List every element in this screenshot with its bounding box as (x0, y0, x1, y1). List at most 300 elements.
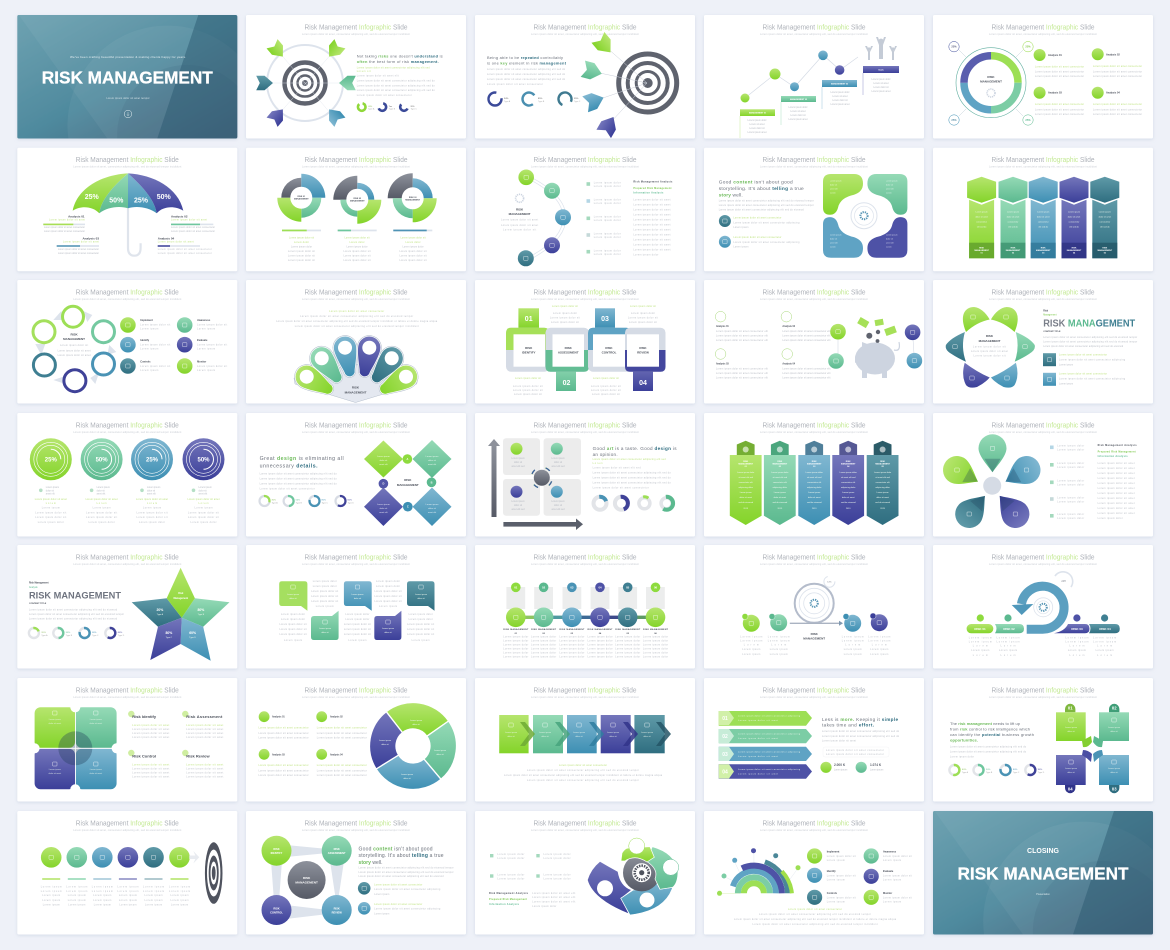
step captions: Lorem ipsum dolor (588, 640, 613, 643)
analysis 04: Lorem ipsum dolor sit amet consectetur (158, 252, 212, 255)
closing label: CLOSING (1027, 848, 1060, 855)
caption blocks: Lorem ipsum dolor sit (280, 628, 307, 631)
list items: Lorem ipsum dolor (1057, 462, 1084, 465)
donut stats: 80% (322, 500, 326, 502)
captions: Lorem ipsum (770, 653, 788, 656)
captions: Lorem ipsum dolor (139, 521, 165, 524)
title: Lorem ipsum dolor sit amet, consectetur adipiscing elit, sed do eiusmod tempor incididunt (302, 166, 410, 169)
hub diagram: REVIEW (332, 910, 342, 914)
star chart: Type B (198, 614, 205, 616)
hub diagram: RISK (273, 847, 280, 851)
banner 01: Lorem ipsum dolor (737, 471, 755, 474)
step captions: Lorem ipsum dolor (643, 640, 668, 643)
text block: Lorem ipsum dolor sit amet consectetur adipiscing elit sed do (593, 476, 671, 480)
captions: Lorem ipsum (144, 899, 163, 902)
captions: Lorem ipsum (996, 640, 1020, 644)
six item list: Controls (827, 892, 838, 895)
donut stats (29, 628, 125, 638)
analysis 02 (171, 214, 215, 233)
step 2: Lorem ipsum amet (788, 118, 808, 121)
analysis column: Lorem ipsum dolor sit amet (1098, 477, 1135, 480)
caption blocks: Lorem ipsum dolor sit (407, 623, 434, 626)
banner 01: MANAGEMENT (738, 463, 754, 466)
flower diagram: MANAGEMENT (979, 339, 1001, 343)
text block (593, 446, 677, 490)
analysis text: Lorem ipsum dolor (532, 905, 557, 908)
caption blocks: Lorem ipsum (316, 605, 334, 608)
step captions: Lorem ipsum dolor (531, 652, 556, 655)
bottom text: Lorem ipsum dolor sit amet consectetur adipiscing elit sed do eiusmod tempor (527, 769, 639, 772)
banner 01: consectetur elit (739, 481, 753, 484)
title: Risk Management Infographic Slide (304, 24, 408, 32)
banner 03 (798, 441, 830, 525)
text block: Less is more. Keeping it simple (822, 717, 898, 722)
piggy bank with money (828, 317, 922, 378)
risk assessment text: Risk Assessment (186, 714, 223, 719)
six item list: Lorem ipsum (827, 900, 845, 904)
captions: Lorem ipsum (870, 653, 888, 656)
feature items: Lorem ipsum dolor sit amet consectetur adipiscing (1059, 358, 1126, 362)
center target (790, 576, 843, 640)
analysis items: Lorem ipsum dolor sit amet consectetur (1035, 103, 1084, 106)
title: Risk Management Infographic Slide (76, 820, 179, 828)
heading block: Lorem ipsum dolor sit amet consectetur adipiscing elit sed do eiusmod tempor (29, 613, 124, 616)
arrow bar 02 (719, 729, 812, 743)
step captions: Lorem ipsum dolor (588, 644, 613, 647)
title: Lorem ipsum dolor sit amet, consectetur adipiscing elit, sed do eiusmod tempor incididunt (760, 431, 868, 434)
captions: Lorem ipsum (143, 886, 164, 888)
arrow bar 02: 02 (722, 734, 728, 740)
analysis blocks: Lorem ipsum dolor sit amet consectetur elit (716, 368, 768, 370)
analysis items: Lorem ipsum dolor sit amet consectetur (1093, 70, 1142, 74)
text block: Lorem ipsum dolor sit amet elit (357, 74, 399, 78)
timeline: 04 (598, 585, 602, 589)
arrow and target (189, 842, 222, 904)
step 3: Lorem ipsum dolor (830, 91, 850, 94)
captions: Lorem ipsum (169, 890, 190, 893)
chevron process: Lorem ipsum (539, 731, 551, 734)
caption blocks: Lorem ipsum dolor sit (311, 595, 339, 598)
slide: four percent circles (17, 413, 237, 536)
title: Lorem ipsum dolor sit amet, consectetur adipiscing elit, sed do eiusmod tempor incididunt (989, 33, 1097, 36)
analysis 01 (43, 214, 85, 233)
slide: target with six arrows (246, 15, 466, 138)
banner 05: RISK (880, 461, 886, 463)
title: Risk Management Infographic Slide (534, 688, 637, 694)
text block: Lorem ipsum dolor sit amet consectetur adipiscing elit sed (593, 458, 666, 461)
stats: 1.074 K (870, 763, 882, 767)
diamond diagram: B (431, 480, 433, 484)
banner 04: MANAGEMENT (841, 463, 856, 466)
six item list: Lorem ipsum dolor sit (827, 874, 856, 878)
title (531, 24, 639, 36)
heading block: Lorem ipsum dolor sit amet consectetur adipiscing elit sed do eiusmod tempor (1043, 340, 1137, 344)
title (531, 290, 639, 301)
step captions: Lorem ipsum dolor (531, 656, 556, 659)
banner 03: Lorem ipsum dolor (806, 471, 823, 474)
bubble row: dolor sit (417, 597, 425, 600)
title: Risk Management Infographic Slide (76, 422, 179, 430)
captions: Lorem ipsum dolor (89, 521, 115, 524)
list items: Lorem ipsum dolor (594, 185, 621, 188)
captions: Lorem ipsum (742, 653, 760, 656)
puzzle diagram: Lorem ipsum (1108, 726, 1120, 729)
step captions: 06 (654, 633, 657, 635)
six item list: Monitor (883, 892, 892, 895)
analysis list: Lorem ipsum dolor sit amet consectetur (317, 726, 367, 730)
column 02: MANAGEMENT (1006, 249, 1021, 252)
matrix quadrants: amet elit sed (551, 465, 565, 468)
analysis items: Analysis 01 (1048, 54, 1062, 57)
slide: chevron squares (475, 678, 695, 802)
captions: Lorem ipsum dolor sit (400, 255, 427, 258)
risk review text: Risk Review (186, 754, 211, 758)
title: Risk Management Infographic Slide (762, 422, 866, 430)
title: Risk Management Infographic Slide (762, 554, 866, 562)
risk identify text: Lorem ipsum dolor sit amet (132, 724, 170, 727)
puzzle diagram: dolor sit (1110, 771, 1118, 774)
step 4 (863, 66, 899, 95)
captions: Lorem (46, 502, 56, 505)
analysis 02: Lorem ipsum dolor sit amet consectetur (171, 226, 215, 229)
flower diagram: RISK (986, 334, 994, 338)
diamond diagram: MANAGEMENT (397, 483, 419, 487)
slide: target with four nodes (704, 545, 924, 668)
slide: cover risk management (17, 15, 237, 138)
frame 03 risk control: RISK (605, 346, 613, 350)
donut stats: 35% (574, 98, 578, 100)
captions: Lorem ipsum dolor sit (136, 511, 168, 514)
donut stats: Type B (389, 108, 396, 110)
title (302, 290, 410, 301)
column 05: 05 (1104, 253, 1107, 255)
percent callouts: 25% (1025, 45, 1031, 49)
frame 04 risk review: RISK (639, 346, 647, 350)
analysis 04: Lorem ipsum dolor sit amet consectetur (158, 248, 212, 251)
bottom text: Lorem ipsum dolor sit amet consectetur (788, 908, 842, 911)
captions: Lorem ipsum (117, 886, 138, 888)
column 03: dolor sit amet (1037, 216, 1050, 219)
analysis list: Lorem ipsum dolor sit amet consectetur (317, 770, 367, 772)
feature items (719, 215, 800, 249)
risk assessment text: Lorem ipsum dolor sit amet (186, 732, 224, 735)
title: Risk Management Infographic Slide (534, 24, 637, 32)
caption blocks: Lorem ipsum dolor sit (344, 633, 371, 636)
analysis blocks: Lorem ipsum dolor sit amet consectetur elit (782, 368, 831, 370)
diamond diagram: dolor sit (428, 459, 436, 462)
blob diagram: dolor sit (830, 238, 837, 241)
feature items (1043, 353, 1126, 386)
donut stats: Type C (322, 502, 328, 504)
captions: Lorem ipsum (844, 648, 862, 651)
blob diagram: amet elit (886, 188, 894, 191)
column 02: dolor sit amet (1007, 216, 1020, 219)
captions: Lorem ipsum (1068, 649, 1086, 652)
captions: Lorem ipsum (969, 640, 992, 644)
captions: Lorem ipsum (119, 899, 137, 902)
puzzle diagram (1056, 704, 1129, 793)
step 4: Lorem ipsum amet (871, 90, 891, 93)
title: Risk Management Infographic Slide (304, 554, 408, 562)
analysis text: Lorem ipsum dolor sit amet elit (532, 892, 576, 895)
step 1: Lorem sit amet (749, 123, 765, 126)
list items: Lorem ipsum dolor (1057, 513, 1084, 516)
captions: Lorem ipsum (770, 648, 788, 651)
analysis list: Lorem ipsum dolor sit amet consectetur (258, 764, 309, 767)
analysis items: Lorem ipsum dolor sit amet consectetur (1093, 75, 1142, 78)
banner 03: sed do eiusmod (807, 502, 822, 504)
title: Risk Management Infographic Slide (992, 422, 1095, 430)
step captions: Lorem ipsum dolor (559, 636, 585, 639)
banner 03: Lorem ipsum (808, 491, 820, 494)
frame 01 risk identify: RISK (525, 346, 533, 350)
title: Risk Management Infographic Slide (76, 554, 179, 562)
slide: three quadrant donuts (246, 148, 466, 271)
line chart nodes (740, 50, 858, 102)
step captions: Lorem ipsum dolor (503, 652, 529, 655)
step 2 (781, 96, 816, 125)
captions: Lorem ipsum dolor sit (289, 237, 314, 240)
title: Risk Management Infographic Slide (992, 688, 1095, 694)
captions: Lorem ipsum (143, 890, 164, 893)
quadrant diagram: dolor sit amet (90, 772, 102, 775)
donut stats: 40% (368, 106, 372, 108)
analysis column: Lorem ipsum dolor sit amet (633, 249, 671, 252)
circle 25 percent (30, 438, 72, 480)
text block: Lorem ipsum dolor sit amet consectetur adipiscing elit sed do (487, 73, 566, 76)
captions: Lorem ipsum dolor (291, 246, 312, 249)
text block: Good art is a taste. Good design is (593, 446, 677, 451)
analysis column: Prepared Risk Management (1098, 450, 1136, 454)
captions: amet elit (198, 493, 208, 496)
donut stats: Type A (272, 502, 278, 504)
step captions: Lorem ipsum dolor (559, 648, 585, 651)
banner 02 (764, 441, 796, 525)
analysis items (1034, 48, 1142, 116)
donut stats: Type B (538, 101, 545, 103)
ring cycle: Lorem ipsum dolor sit amet (58, 349, 91, 352)
percent callouts: 25% (951, 118, 957, 122)
flower diagram: Lorem ipsum dolor sit amet (971, 350, 1008, 353)
text block (357, 54, 443, 97)
risk assessment text (182, 711, 224, 739)
donut stats: Type A (368, 108, 375, 110)
title: Lorem ipsum dolor sit amet, consectetur adipiscing elit, sed do eiusmod tempor incididunt (531, 166, 639, 169)
captions: Lorem ipsum dolor sit (188, 516, 219, 519)
heading block: RISK MANAGEMENT (29, 590, 121, 601)
ring cycle: Lorem ipsum dolor sit (60, 344, 88, 347)
captions: Lorem (1069, 644, 1084, 648)
analysis column: Lorem ipsum dolor sit amet (633, 204, 671, 207)
step captions: Lorem ipsum dolor (643, 652, 668, 655)
text block: Lorem ipsum dolor sit amet consectetur adipiscing elit sed do (487, 68, 566, 71)
arrow bar 01: Lorem ipsum dolor sit amet consectetur adipiscing (738, 714, 801, 718)
banner 01: Lorem ipsum (740, 491, 752, 494)
frame 04 risk review (625, 328, 666, 391)
arrow bar 03: 03 (722, 752, 728, 758)
star chart: Type C (166, 637, 173, 639)
title: Lorem ipsum dolor sit amet, consectetur adipiscing elit, sed do eiusmod tempor incididunt (302, 431, 410, 434)
title (531, 554, 639, 566)
analysis 04 (158, 237, 212, 255)
analysis column: Lorem ipsum dolor sit amet (1098, 492, 1135, 495)
step captions: Lorem ipsum dolor (559, 640, 585, 643)
frame 02 risk assessment: ASSESSMENT (558, 350, 579, 354)
analysis blocks: Lorem ipsum dolor sit amet consectetur elit (782, 376, 831, 379)
title: Lorem ipsum dolor sit amet, consectetur adipiscing elit, sed do eiusmod tempor incididunt (531, 33, 639, 36)
list items (490, 853, 571, 880)
donut stats (488, 90, 581, 108)
caption blocks: Lorem ipsum dolor sit (374, 600, 402, 603)
step 4: Lorem sit amet (873, 82, 889, 85)
analysis list: Lorem ipsum dolor sit amet consectetur (258, 736, 309, 740)
step captions: Lorem ipsum dolor (615, 648, 640, 651)
arrow bar 02: Lorem ipsum dolor sit amet consectetur adipiscing (738, 732, 801, 736)
diamond diagram: Lorem ipsum (426, 455, 438, 458)
analysis items: Lorem ipsum dolor sit amet consectetur (1035, 108, 1084, 112)
diamond diagram: C (407, 505, 409, 509)
timeline: 02 (542, 585, 546, 589)
slide: swirl pie (475, 811, 695, 934)
title (760, 290, 868, 301)
caption blocks: Lorem ipsum dolor sit (592, 393, 620, 396)
timeline: 01 (514, 585, 518, 589)
step captions: Lorem ipsum dolor (559, 656, 585, 659)
column 04: consectetur (1069, 221, 1080, 224)
six item list: Lorem ipsum (140, 328, 158, 330)
captions: Lorem ipsum (999, 649, 1017, 652)
text block: Lorem ipsum dolor sit amet consectetur adipiscing elit sed do (822, 730, 900, 733)
captions: Lorem ipsum (144, 894, 163, 897)
banner 01: RISK (743, 461, 749, 463)
fan diagram: RISK (352, 385, 360, 389)
frame 01 risk identify: IDENTIFY (522, 350, 536, 354)
analysis text (489, 892, 576, 908)
analysis list: Analysis 02 (330, 716, 343, 719)
title (989, 24, 1097, 36)
heading block: Management (1043, 314, 1057, 316)
hub diagram (262, 836, 352, 925)
feature items: Lorem ipsum (1059, 364, 1073, 366)
slide: target with four arrows (475, 15, 695, 138)
center label: Lorem ipsum dolor sit (503, 229, 536, 232)
title (73, 820, 182, 832)
timeline: 06 (654, 585, 657, 589)
hub diagram: MANAGEMENT (295, 880, 318, 884)
captions: Lorem ipsum (171, 904, 188, 906)
donut stats: Type A (41, 634, 48, 637)
analysis blocks: Analysis 03 (716, 362, 729, 365)
six item list: Awareness (883, 850, 897, 854)
banner 04: dolor sit amet (842, 496, 855, 499)
captions (35, 486, 220, 524)
blob diagram: Lorem (830, 247, 836, 249)
column 04 (1060, 177, 1088, 258)
caption blocks: Lorem ipsum dolor sit (374, 590, 402, 593)
turn arrow (1012, 572, 1073, 629)
analysis column: Lorem ipsum dolor sit amet (633, 214, 671, 217)
donut chart: MANAGEMENT (980, 80, 1002, 84)
title: Lorem ipsum dolor sit amet, consectetur adipiscing elit, sed do eiusmod tempor incididunt (302, 563, 410, 566)
arrow bar 04: Lorem ipsum dolor sit amet (738, 772, 778, 776)
captions: Lorem ipsum (119, 894, 137, 897)
diamond diagram: Lorem ipsum (426, 503, 438, 506)
bottom text: Lorem ipsum dolor sit amet consectetur adipiscing elit sed do eiusmod tempor (759, 913, 871, 916)
puzzle diagram: dolor sit (1110, 730, 1118, 733)
donut stats: Type D (118, 635, 125, 637)
intro text: Lorem ipsum dolor sit amet consectetur (329, 310, 384, 313)
six item list: Lorem ipsum dolor sit (197, 324, 227, 326)
bubble row: dolor sit (384, 631, 392, 634)
cover title: RISK MANAGEMENT (42, 67, 213, 87)
puzzle diagram: dolor sit (1067, 730, 1075, 733)
fan diagram: MANAGEMENT (345, 390, 367, 394)
risk assessment text: Lorem ipsum dolor sit amet (186, 728, 224, 731)
text block: The risk management needs to lift up (950, 721, 1021, 726)
banner 03: MANAGEMENT (807, 463, 822, 466)
captions: Lorem ipsum (117, 890, 138, 893)
matrix quadrants: amet elit sed (551, 508, 565, 511)
quadrant diagram: Lorem ipsum (90, 718, 102, 721)
arrow bar 04: 04 (722, 770, 728, 776)
analysis column: Lorem ipsum dolor sit amet (633, 239, 671, 242)
diamond diagram: dolor sit (380, 507, 388, 510)
bubble row: dolor sit (321, 631, 329, 634)
analysis column: Lorem ipsum dolor (633, 254, 659, 257)
captions: Lorem ipsum (1093, 640, 1116, 644)
analysis 03 (57, 237, 99, 255)
heading block: RISK MANAGEMENT (1043, 319, 1135, 330)
step captions: Lorem ipsum dolor (531, 640, 556, 643)
analysis column: Lorem ipsum dolor sit amet (633, 219, 671, 222)
caption blocks: Lorem ipsum (348, 639, 366, 642)
quadrant diagram: dolor sit amet (90, 722, 102, 725)
captions: Lorem ipsum dolor sit (35, 511, 67, 514)
banner 02: MANAGEMENT (773, 463, 788, 466)
center label: Lorem ipsum dolor sit amet (501, 224, 538, 227)
diamond diagram: amet elit (428, 463, 437, 466)
cycle ring: dolor sit (412, 723, 420, 726)
text block: Lorem ipsum dolor sit amet elit sed (593, 466, 641, 470)
text block: often the best form of risk management. (357, 59, 439, 64)
analysis blocks: Lorem ipsum dolor sit amet consectetur elit (782, 330, 831, 333)
title: Risk Management Infographic Slide (762, 157, 866, 164)
donut 02 (333, 176, 381, 224)
column 05: MANAGEMENT (1098, 249, 1113, 252)
analysis blocks: Lorem ipsum dolor sit amet consectetur elit (716, 334, 768, 337)
caption blocks: Lorem ipsum dolor sit (280, 633, 307, 636)
slide: four linked frames (475, 280, 695, 404)
title: Lorem ipsum dolor sit amet, consectetur adipiscing elit, sed do eiusmod tempor incididunt (531, 431, 639, 434)
matrix quadrants: amet elit sed (511, 465, 525, 468)
title: Lorem ipsum dolor sit amet, consectetur adipiscing elit, sed do eiusmod tempor incididunt (73, 829, 182, 832)
captions: Lorem ipsum (68, 899, 86, 902)
analysis 01: Lorem ipsum dolor sit amet (49, 219, 85, 222)
title: Risk Management Infographic Slide (534, 290, 637, 296)
analysis text: Prepared Risk Management (489, 898, 527, 901)
captions: Lorem ipsum (1065, 640, 1088, 644)
banner 02: 02 (779, 466, 782, 468)
list items: Lorem ipsum dolor (594, 216, 621, 219)
captions: Lorem ipsum dolor sit (344, 250, 371, 253)
feature items: Lorem ipsum (1059, 382, 1073, 386)
list items: Lorem ipsum dolor (497, 853, 525, 856)
analysis items: Lorem ipsum dolor sit amet consectetur (1093, 65, 1142, 68)
captions: Lorem ipsum dolor sit (400, 237, 426, 240)
title: Lorem ipsum dolor sit amet, consectetur adipiscing elit, sed do eiusmod tempor incididunt (531, 563, 639, 566)
six item list (120, 317, 227, 374)
banner 05 (867, 441, 898, 525)
